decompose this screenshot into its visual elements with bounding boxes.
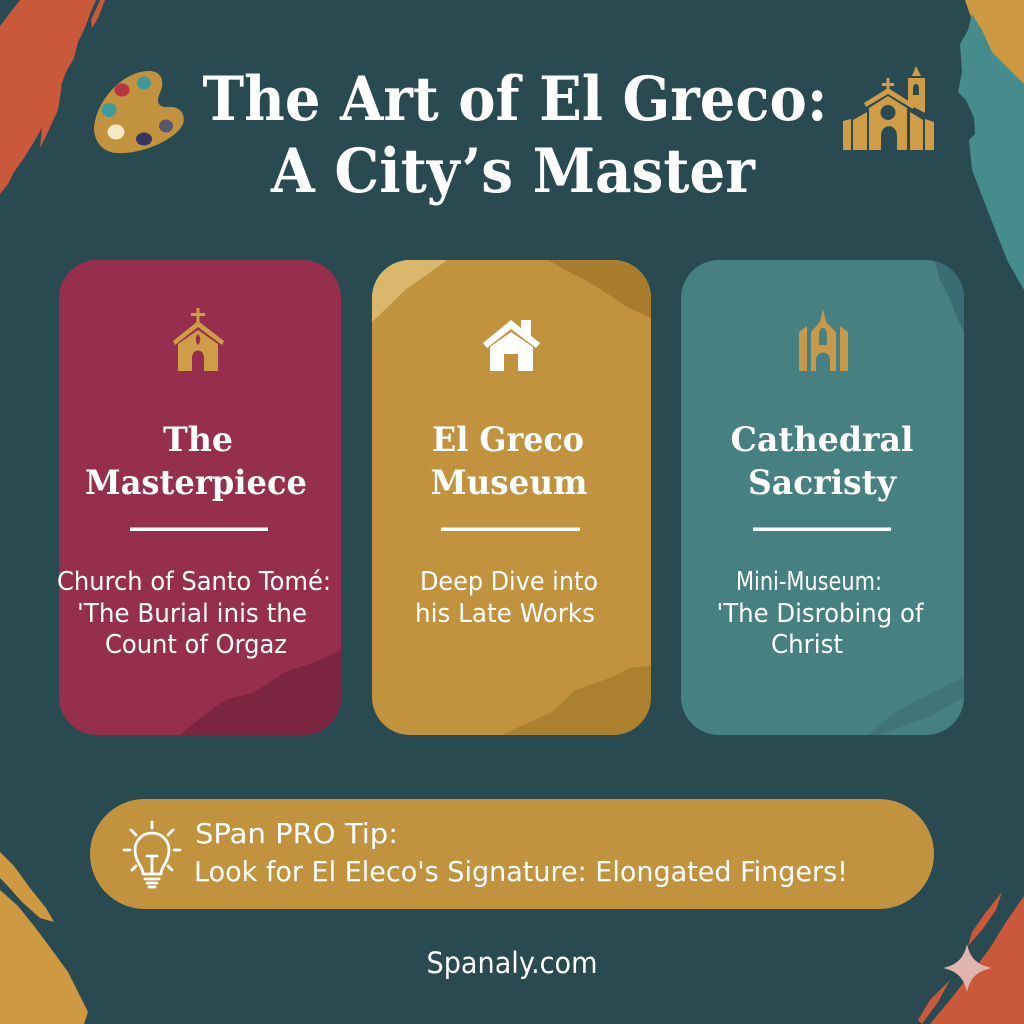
card text: Christ: [771, 630, 843, 660]
brush stroke: top-right gold: [965, 0, 1024, 84]
card text: his Late Works: [415, 599, 595, 629]
icon: chapel: [173, 308, 224, 371]
card text: Church of Santo Tomé:: [57, 567, 331, 597]
tip text: [194, 817, 848, 888]
card text: [415, 567, 598, 629]
card text: Count of Orgaz: [105, 630, 287, 660]
icon: house: [483, 320, 540, 371]
brush stroke: bottom-right orange: [918, 892, 1024, 1024]
title: [202, 64, 828, 207]
card heading: [730, 420, 914, 503]
brush stroke: top-left orange: [0, 0, 105, 194]
brush stroke: right teal: [958, 14, 1024, 290]
panel: The Masterpiece: [57, 260, 342, 735]
card heading: Cathedral: [730, 420, 914, 460]
icon: church: [843, 66, 934, 150]
title: The Art of El Greco:: [202, 64, 828, 135]
card heading: El Greco: [432, 420, 584, 460]
panel: Cathedral Sacristy: [681, 260, 966, 735]
card heading: [430, 420, 588, 503]
card heading: The: [163, 420, 233, 460]
footer website: Spanaly.com: [426, 946, 598, 980]
card text: Deep Dive into: [420, 567, 598, 597]
brush stroke: bottom-left gold: [0, 852, 88, 1024]
card heading: Masterpiece: [85, 463, 307, 503]
icon: painter's palette: [94, 71, 184, 153]
card text: Mini-Museum:: [736, 567, 882, 597]
card text: [716, 567, 924, 660]
tip text: SPan PRO Tip:: [195, 817, 398, 850]
card text: 'The Burial inis the: [77, 599, 307, 629]
card heading: Sacristy: [748, 463, 897, 503]
panel: pro tip: [90, 799, 934, 909]
card text: 'The Disrobing of: [716, 599, 924, 629]
tip text: Look for El Eleco's Signature: Elongated Fingers!: [194, 855, 848, 888]
title: A City’s Master: [270, 136, 756, 207]
icon: light bulb: [124, 822, 180, 887]
card heading: Museum: [430, 463, 588, 503]
card heading: [85, 420, 307, 503]
panel: El Greco Museum: [370, 258, 655, 740]
card text: [57, 567, 331, 660]
icon: sparkle: [943, 944, 992, 992]
icon: cathedral: [799, 309, 848, 371]
